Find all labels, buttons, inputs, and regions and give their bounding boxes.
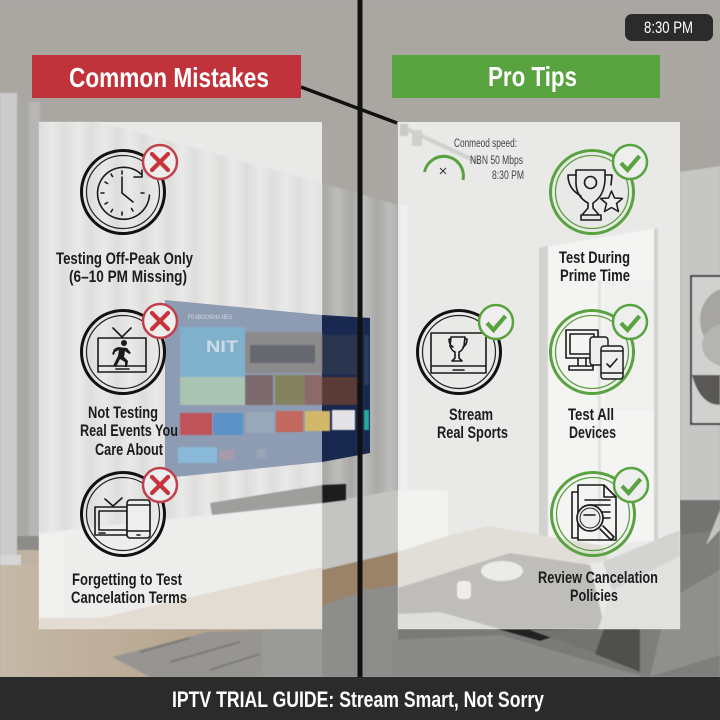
icon: TV with trophy and check badge: [418, 305, 513, 394]
vertical divider: [358, 0, 362, 677]
label: test all devices: Devices: [569, 424, 616, 442]
label: review cancelation policies: Policies: [570, 587, 618, 605]
label: test all devices: Test All: [568, 406, 614, 424]
label: stream real sports: Stream: [449, 406, 493, 424]
icon: devices with check badge: [550, 305, 647, 394]
label: not testing real events: [80, 404, 178, 459]
speed gauge note: NBN 50 Mbps: [470, 155, 523, 167]
label: forgetting cancelation terms: [71, 571, 187, 607]
badge: check: [613, 145, 647, 179]
header: pro tips: [392, 55, 660, 98]
badge: check: [479, 305, 513, 339]
label: forgetting cancelation terms: Forgetting to Test: [72, 571, 182, 589]
footer bar: [0, 677, 720, 720]
TV screen: NIT: [206, 337, 239, 356]
label: forgetting cancelation terms: Cancelation Terms: [71, 589, 187, 607]
label: not testing real events: Real Events You: [80, 422, 178, 440]
badge: X: [143, 304, 177, 338]
label: test during prime time: [559, 249, 630, 285]
icon: clock with X badge: [82, 145, 177, 234]
panel: common mistakes: [39, 122, 322, 629]
badge: check: [613, 305, 647, 339]
diagonal rail: [301, 87, 397, 123]
label: review cancelation policies: [538, 569, 658, 605]
speed gauge note: Conmeod speed:: [454, 138, 517, 150]
label: testing off-peak: Testing Off-Peak Only: [56, 250, 194, 268]
icon: document and magnifier with check badge: [552, 468, 648, 556]
door in background: [539, 228, 658, 550]
label: not testing real events: Care About: [95, 441, 163, 459]
TV screen: F0 ABOOSIHA NEG: [188, 315, 232, 321]
TV screen: [165, 300, 370, 478]
speed gauge note: [424, 138, 524, 182]
label: testing off-peak: [56, 250, 194, 286]
header: pro tips: Pro Tips: [488, 61, 577, 92]
label: review cancelation policies: Review Cancelation: [538, 569, 658, 587]
soundbar: [210, 484, 346, 515]
badge: X: [143, 145, 177, 179]
clock pill: 8:30 PM: [644, 18, 693, 37]
label: stream real sports: [437, 406, 508, 442]
label: testing off-peak: (6–10 PM Missing): [69, 268, 187, 286]
badge: check: [614, 468, 648, 502]
footer bar: IPTV TRIAL GUIDE: Stream Smart, Not Sorry: [172, 687, 545, 712]
label: stream real sports: Real Sports: [437, 424, 508, 442]
header: common mistakes: [32, 55, 301, 98]
icon: TV with runner and X badge: [82, 304, 177, 394]
label: test during prime time: Test During: [559, 249, 630, 267]
badge: X: [143, 468, 177, 502]
label: test all devices: [568, 406, 616, 442]
speed gauge note: 8:30 PM: [492, 170, 524, 182]
picture frame: [691, 276, 720, 424]
icon: trophy and star with check badge: [550, 145, 647, 234]
label: not testing real events: Not Testing: [88, 404, 158, 422]
header: common mistakes: Common Mistakes: [69, 62, 269, 93]
panel: pro tips: [398, 122, 680, 629]
icon: TV and phone with X badge: [82, 468, 177, 556]
clock pill: [625, 14, 713, 41]
label: test during prime time: Prime Time: [560, 267, 630, 285]
